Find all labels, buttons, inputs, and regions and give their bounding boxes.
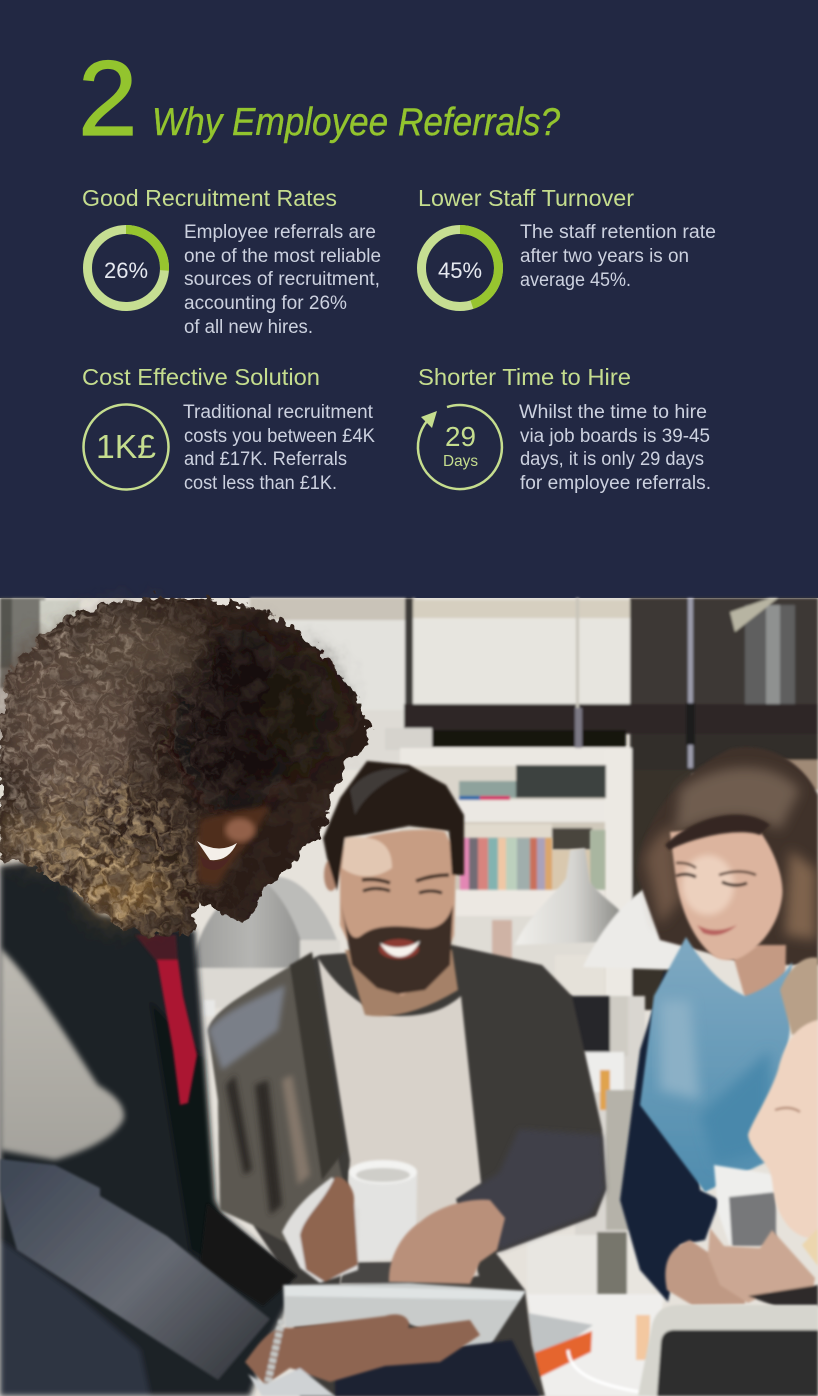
body text: after two years is on: [520, 246, 689, 267]
donut chart: 26%: [88, 230, 164, 306]
black upper arm: [200, 1203, 297, 1306]
book: [714, 1165, 776, 1246]
body text: Traditional recruitment: [183, 402, 374, 423]
hair colour zones: [0, 614, 335, 918]
body text: Whilst the time to hire: [519, 402, 707, 423]
body text: [183, 402, 375, 494]
title text: Why Employee Referrals?: [152, 101, 561, 144]
cardigan: [208, 945, 606, 1396]
body text: one of the most reliable: [184, 246, 381, 267]
icon: 1K pound circle: [84, 404, 168, 490]
fringe: [665, 815, 770, 850]
body text: costs you between £4K: [184, 426, 375, 447]
hair curl texture light: [0, 591, 251, 936]
head: [323, 761, 464, 1016]
donut chart: 26%: 26%: [104, 258, 148, 283]
hands: [665, 1228, 818, 1306]
person: man in profile at right edge: [748, 957, 818, 1266]
body text: days, it is only 29 days: [520, 449, 704, 470]
tablet, hand and jeans: [245, 1283, 540, 1396]
donut chart: 45%: 45%: [438, 258, 482, 283]
face highlight and smile over hair: [197, 806, 270, 886]
donut chart: 45%: [422, 230, 498, 306]
pointing hand: [389, 1200, 505, 1284]
subheading: Good Recruitment Rates: [82, 185, 337, 211]
icon: circular arrow with 29 days: Days: [443, 453, 478, 470]
body text: accounting for 26%: [184, 293, 347, 314]
scarf: [640, 937, 792, 1192]
jeans: [335, 1340, 540, 1396]
body text: via job boards is 39-45: [520, 426, 710, 447]
subheading: Shorter Time to Hire: [418, 364, 631, 390]
section number: 2: [78, 38, 138, 158]
navy jacket: [620, 970, 720, 1302]
table with notebook: [527, 1294, 664, 1396]
woman's forearms in front of the man: [0, 1159, 297, 1380]
photo: colleagues looking at a tablet in an office: [0, 598, 818, 1396]
panel: lower staff turnover: [418, 185, 716, 306]
panel: good recruitment rates: [82, 185, 381, 338]
background lower right: [203, 996, 653, 1296]
tablet: [283, 1283, 526, 1349]
hair dark blotches: [0, 598, 370, 935]
body text: cost less than £1K.: [184, 473, 337, 494]
foreground monitor: [638, 1305, 818, 1396]
subheading: Lower Staff Turnover: [418, 185, 634, 211]
lamps: [193, 848, 690, 1008]
hair curl texture golden: [0, 754, 217, 939]
hand under tablet and bracelet: [245, 1314, 480, 1396]
body text: The staff retention rate: [520, 222, 716, 243]
body text: Employee referrals are: [184, 222, 376, 243]
person: woman with curly hair, torso: [0, 598, 370, 1396]
panel: cost effective solution: [82, 364, 375, 494]
person: woman with blue scarf: [620, 747, 818, 1306]
red top: [135, 935, 197, 1105]
person: smiling man: [208, 761, 606, 1396]
panel: shorter time to hire: [418, 364, 711, 494]
panel: dark navy background: [0, 0, 818, 598]
neck: [730, 945, 786, 1000]
hand holding mug: [282, 1177, 360, 1283]
icon: circular arrow with 29 days: [418, 405, 502, 489]
icon: circular arrow with 29 days: 29: [445, 421, 476, 452]
face: [193, 808, 270, 886]
t-shirt: [318, 958, 481, 1285]
body text: for employee referrals.: [520, 473, 711, 494]
body text: sources of recruitment,: [184, 269, 380, 290]
hair: [0, 598, 370, 935]
grey sleeve: [0, 1159, 270, 1380]
face: [670, 826, 783, 960]
body text: and £17K. Referrals: [184, 449, 347, 470]
subheading: Cost Effective Solution: [82, 364, 320, 390]
heading: section title: [78, 38, 561, 158]
hair back: [637, 747, 818, 965]
jacket: [0, 860, 300, 1396]
coffee mug: [340, 1160, 417, 1284]
book spines on shelf: [455, 830, 605, 1008]
blurred foreground lamp: [0, 948, 124, 1160]
body text: [519, 402, 711, 494]
body text: of all new hires.: [184, 317, 313, 338]
office background: [0, 598, 818, 1010]
body text: [184, 222, 381, 338]
icon: 1K pound circle: 1K£: [96, 428, 156, 465]
body text: average 45%.: [520, 270, 631, 291]
body text: [520, 222, 716, 291]
